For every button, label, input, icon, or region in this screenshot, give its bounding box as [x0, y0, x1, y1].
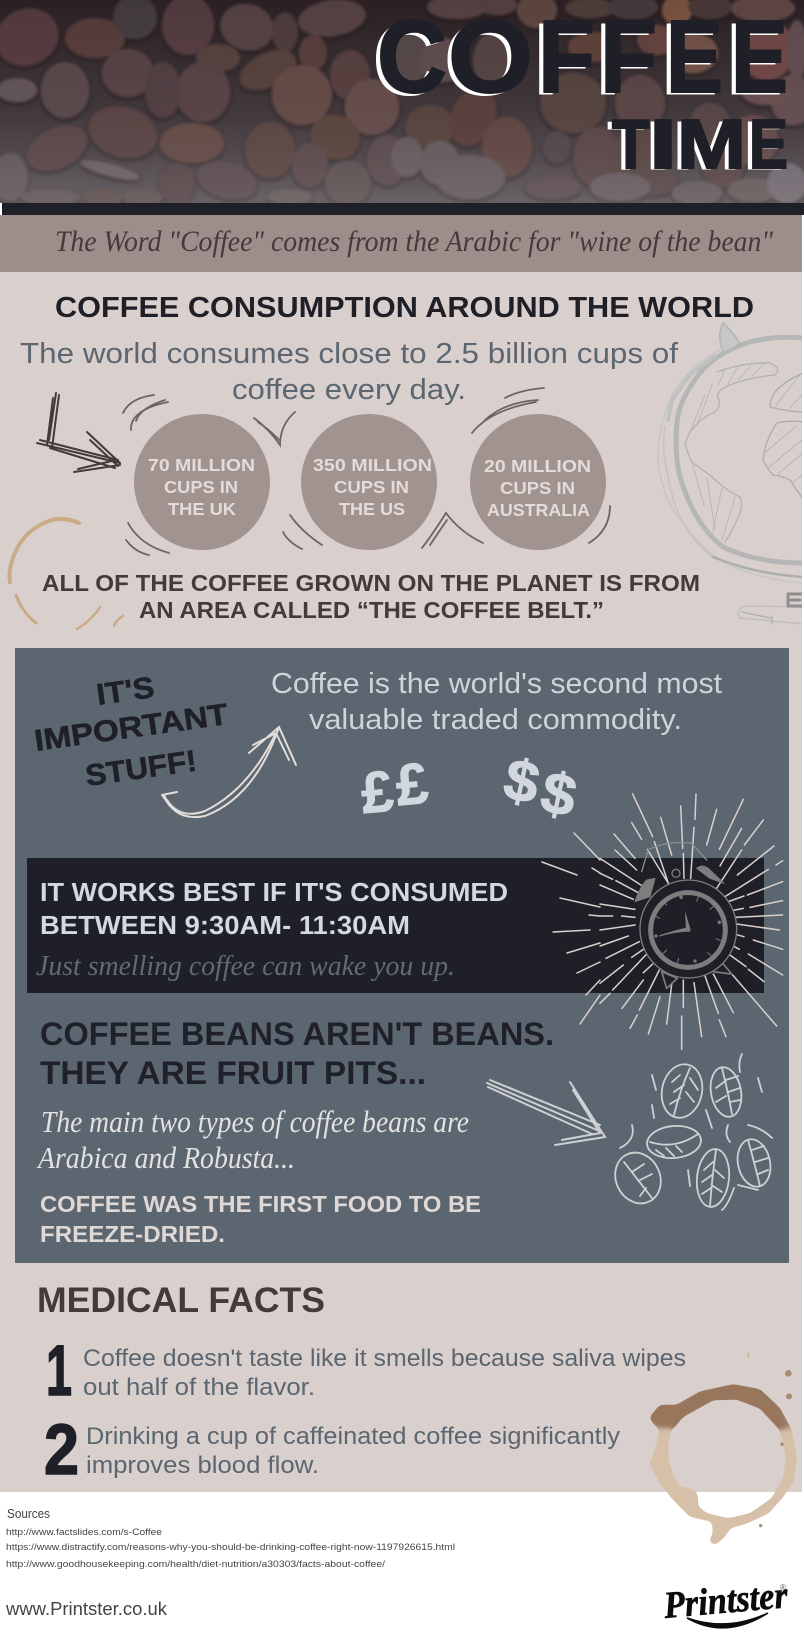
title: COFFEE TIME: E — [744, 106, 783, 184]
icons: pound signs: £ — [393, 751, 431, 818]
statement: daily cups: The world consumes close to 2.5 billion cups of — [20, 338, 678, 370]
circle stat: Australia: CUPS IN — [500, 478, 575, 498]
circle stat: Australia — [470, 414, 606, 550]
medical fact 1: Coffee doesn't taste like it smells because saliva wipes — [83, 1345, 686, 1372]
title: COFFEE TIME: F — [533, 2, 590, 116]
title: COFFEE TIME: T — [607, 106, 644, 184]
website url: www.Printster.co.uk — [5, 1598, 168, 1619]
title: COFFEE TIME: E — [666, 0, 723, 114]
sources: http://www.goodhousekeeping.com/health/diet-nutrition/a30303/facts-about-coffee/ — [6, 1559, 385, 1570]
circle stat: US — [301, 414, 437, 550]
title: COFFEE TIME: E — [661, 2, 718, 116]
title: COFFEE TIME: F — [600, 0, 657, 114]
heading: beans are fruit pits: COFFEE BEANS AREN'T BEANS. — [40, 1016, 554, 1052]
medical fact 2: improves blood flow. — [86, 1452, 319, 1479]
statement: daily cups — [20, 338, 678, 406]
circle stat: Australia: AUSTRALIA — [487, 500, 590, 520]
title: COFFEE TIME: F — [538, 0, 595, 114]
header photo: coffee beans — [0, 0, 804, 205]
logo: Printster: ® — [780, 1583, 786, 1592]
coffee stain: ring — [649, 1353, 797, 1545]
statement: freeze-dried: COFFEE WAS THE FIRST FOOD TO BE — [40, 1191, 481, 1217]
title: COFFEE TIME: F — [595, 2, 652, 116]
band: best time to drink: Just smelling coffee can wake you up. — [36, 950, 455, 982]
circle stat: UK: CUPS IN — [164, 477, 238, 497]
title: COFFEE TIME: O — [443, 2, 528, 117]
icons: pound signs — [358, 751, 431, 826]
title: COFFEE TIME: O — [448, 0, 533, 114]
medical fact 1: 1 — [46, 1332, 72, 1411]
title: COFFEE TIME — [372, 0, 788, 184]
statement: traded commodity: Coffee is the world's second most — [271, 668, 722, 700]
title: COFFEE TIME: E — [731, 0, 788, 114]
medical fact 1: out half of the flavor. — [83, 1374, 315, 1401]
sources: https://www.distractify.com/reasons-why-you-should-be-drinking-coffee-right-now-1197926615.html — [6, 1542, 455, 1553]
icon: alarm clock — [635, 842, 737, 988]
arrow: chalk curve to commodity text — [162, 727, 296, 817]
statement: types of coffee beans: Arabica and Robusta... — [36, 1140, 295, 1175]
statement: the coffee belt: AN AREA CALLED “THE COFFEE BELT.” — [139, 597, 604, 623]
icons: dollar signs: $ — [498, 746, 545, 817]
heading: coffee consumption: COFFEE CONSUMPTION AROUND THE WORLD — [55, 292, 754, 324]
statement: the coffee belt — [42, 570, 700, 623]
coffee stain: left partial ring — [10, 519, 123, 629]
title: COFFEE TIME: T — [612, 105, 650, 183]
title: COFFEE TIME: E — [749, 105, 788, 183]
band: best time to drink: BETWEEN 9:30AM- 11:30AM — [40, 910, 410, 940]
arrow: sketch pointing to circles — [37, 393, 120, 472]
statement: freeze-dried — [40, 1191, 481, 1247]
statement: types of coffee beans — [36, 1104, 469, 1175]
circle stat: UK: THE UK — [168, 499, 236, 519]
icon: coffee beans sketch — [607, 1054, 775, 1211]
icons: dollar signs: $ — [535, 759, 582, 830]
sources: http://www.factslides.com/s-Coffee — [6, 1527, 162, 1538]
band: best time to drink: IT WORKS BEST IF IT'S CONSUMED — [40, 877, 508, 907]
medical fact 2: Drinking a cup of caffeinated coffee significantly — [86, 1423, 621, 1450]
callout: it's important stuff — [32, 671, 230, 793]
statement: the coffee belt: ALL OF THE COFFEE GROWN ON THE PLANET IS FROM — [42, 570, 700, 596]
title: COFFEE TIME: I — [644, 106, 672, 184]
callout: it's important stuff: STUFF! — [83, 745, 199, 793]
circle stat: UK: 70 MILLION — [148, 455, 255, 475]
sketch accent marks around circles — [123, 388, 610, 555]
medical fact 2 — [44, 1411, 621, 1490]
band: best time to drink — [27, 858, 764, 993]
white footer background — [0, 1492, 804, 1650]
dark divider bar — [2, 203, 804, 215]
title: COFFEE TIME: C — [377, 0, 447, 114]
statement: daily cups: coffee every day. — [232, 374, 466, 406]
icon: sunburst rays — [542, 794, 783, 1049]
title: COFFEE TIME: I — [649, 105, 677, 183]
illustration: globe sketch — [658, 323, 804, 624]
icons: dollar signs — [498, 746, 582, 830]
arrow: chalk pointing to beans — [487, 1080, 605, 1145]
heading: beans are fruit pits: THEY ARE FRUIT PITS... — [40, 1055, 426, 1091]
statement: traded commodity — [271, 668, 722, 736]
circle stat: US: CUPS IN — [334, 477, 409, 497]
icons: pound signs: £ — [358, 759, 396, 826]
page background panel — [0, 215, 802, 1492]
title: COFFEE TIME: E — [726, 2, 783, 116]
medical fact 2: 2 — [44, 1411, 79, 1490]
medical fact 1 — [46, 1332, 686, 1411]
callout: it's important stuff: IMPORTANT — [32, 698, 230, 758]
banner: origin of the word coffee — [0, 215, 802, 272]
circle stat: Australia: 20 MILLION — [484, 456, 591, 476]
statement: freeze-dried: FREEZE-DRIED. — [40, 1221, 225, 1247]
panel: important facts — [15, 648, 789, 1263]
title: COFFEE TIME: M — [677, 105, 746, 183]
heading: beans are fruit pits — [40, 1016, 554, 1091]
sources: Sources — [7, 1506, 50, 1521]
title: COFFEE TIME: C — [372, 2, 442, 117]
statement: traded commodity: valuable traded commodity. — [309, 704, 682, 736]
callout: it's important stuff: IT'S — [94, 671, 156, 712]
heading: medical facts: MEDICAL FACTS — [37, 1281, 325, 1320]
statement: types of coffee beans: The main two types of coffee beans are — [41, 1104, 469, 1139]
circle stat: US: THE US — [339, 499, 405, 519]
title: COFFEE TIME: M — [672, 106, 741, 184]
sources — [6, 1506, 455, 1570]
circle stat: UK — [134, 414, 270, 550]
circle stat: US: 350 MILLION — [313, 455, 432, 475]
logo: Printster: Printster — [661, 1574, 790, 1627]
